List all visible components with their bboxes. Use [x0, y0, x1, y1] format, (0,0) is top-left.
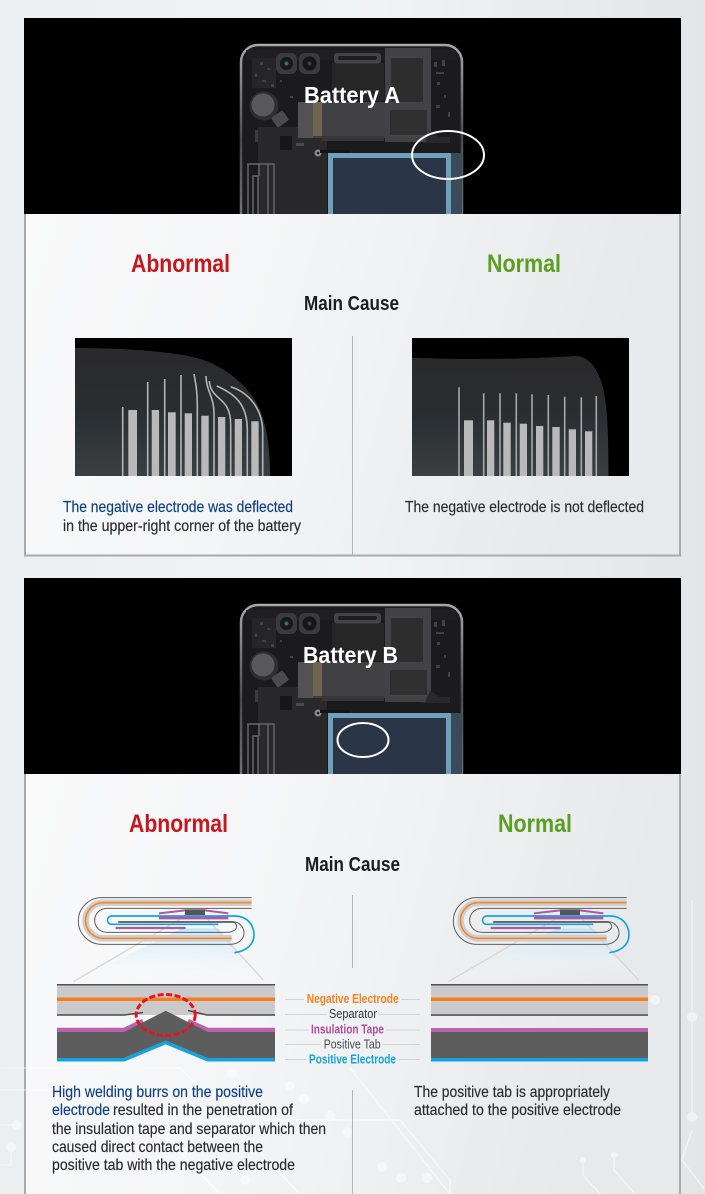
- text: abnormal explanation: [63, 499, 301, 535]
- panel: Battery A: [24, 18, 681, 556]
- heading: Battery A: Battery A: [304, 82, 400, 108]
- heading: Abnormal: Abnormal: [129, 810, 228, 838]
- text: normal explanation: [414, 1084, 621, 1119]
- text: normal explanation: attached to the positive electrode: [414, 1102, 621, 1119]
- text: abnormal explanation: the insulation tape and separator which then: [52, 1121, 326, 1138]
- text: abnormal explanation: resulted in the penetration of: [113, 1102, 293, 1119]
- hero: phone with Battery A highlighted: [24, 18, 681, 235]
- cross-section: normal: [431, 984, 648, 1062]
- legend: layer labels: Negative Electrode: [307, 992, 399, 1006]
- text: abnormal explanation: [52, 1084, 326, 1174]
- text: normal explanation: The positive tab is appropriately: [414, 1084, 610, 1101]
- panel: Battery B: [0, 578, 705, 1194]
- diagram: abnormal battery fold with zoom: [57, 898, 275, 1060]
- text: abnormal explanation: in the upper-right corner of the battery: [63, 518, 301, 535]
- callout: upper-right battery corner: [412, 131, 484, 179]
- legend: layer labels: Insulation Tape: [311, 1022, 384, 1036]
- hero: phone with Battery B highlighted: [24, 578, 681, 795]
- text: abnormal explanation: The negative electrode was deflected: [63, 499, 293, 516]
- legend: layer labels: Separator: [329, 1007, 377, 1021]
- callout: welding burr highlight: [136, 994, 195, 1036]
- heading: Abnormal: Abnormal: [131, 250, 230, 278]
- text: abnormal explanation: caused direct contact between the: [52, 1139, 263, 1156]
- text: normal explanation: The negative electrode is not deflected: [405, 499, 644, 516]
- legend: layer labels: Positive Electrode: [309, 1052, 396, 1066]
- text: abnormal explanation: High welding burrs on the positive: [52, 1084, 263, 1101]
- image: normal electrode: [412, 338, 629, 476]
- legend: layer labels: Positive Tab: [324, 1038, 381, 1052]
- image: deflected electrode: [75, 338, 292, 476]
- heading: Main Cause: Main Cause: [305, 854, 400, 876]
- text: abnormal explanation: electrode: [52, 1102, 110, 1119]
- heading: Normal: Normal: [487, 250, 561, 278]
- legend: layer labels: [285, 992, 420, 1066]
- circuit board background pattern: [0, 900, 705, 1194]
- callout: battery centre area: [338, 723, 388, 757]
- heading: Main Cause: Main Cause: [304, 293, 399, 315]
- text: abnormal explanation: positive tab with the negative electrode: [52, 1157, 295, 1174]
- diagram: normal battery fold with zoom: [431, 898, 648, 1062]
- cross-section: abnormal: [57, 984, 275, 1060]
- heading: Normal: Normal: [498, 810, 572, 838]
- heading: Battery B: Battery B: [303, 642, 398, 668]
